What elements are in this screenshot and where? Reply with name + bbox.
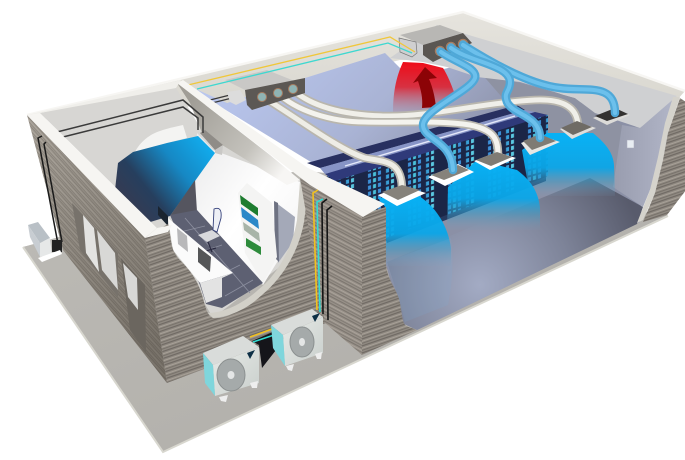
office back wall [40, 88, 302, 318]
striped right wall end [643, 98, 685, 222]
office air conditioner [200, 130, 223, 155]
partition cap [177, 80, 385, 217]
office desk [168, 218, 233, 303]
windows [72, 203, 118, 297]
front wall with torn opening [145, 180, 326, 383]
outdoor condenser unit right [271, 309, 323, 371]
partition wall left face [300, 178, 362, 355]
terminal 3 [474, 152, 516, 170]
rear rim of building [27, 12, 685, 128]
wall caps [27, 80, 385, 238]
terminal 5 [560, 121, 596, 139]
terminal 6 [593, 108, 630, 125]
dark red return air arrow [413, 67, 437, 108]
office floor [170, 210, 263, 308]
left duct connector box [245, 78, 305, 110]
darker recess wall [480, 72, 622, 187]
server racks [307, 105, 548, 243]
rack base [386, 177, 546, 243]
rear pipes to left ceiling device [210, 95, 232, 103]
rack fronts [325, 115, 548, 242]
monitor rear [177, 228, 188, 252]
office dark cabinets and blue air cone [115, 136, 215, 223]
faint cone spill on floor [386, 238, 452, 322]
monitor front [198, 247, 211, 272]
partition wall inner face [177, 83, 300, 185]
cone 3 [522, 133, 615, 196]
ceiling terminals [378, 108, 630, 206]
cream ducts [263, 90, 578, 190]
blue duct to second terminal [423, 52, 475, 170]
cone 2 [447, 160, 540, 230]
red warm air fan [393, 62, 454, 112]
floor of main room [387, 178, 643, 330]
outdoor condenser unit left [203, 336, 259, 402]
left wall [27, 115, 167, 383]
connecting pipes between outdoor units [250, 329, 274, 342]
blue duct to fourth terminal [451, 48, 540, 138]
partition wall front face [362, 207, 417, 355]
office rear pipes [57, 100, 203, 137]
terminal 2 [428, 164, 474, 186]
duct to second terminal [278, 93, 498, 155]
left ceiling device [227, 90, 246, 105]
terminal 4 [521, 134, 560, 155]
office chair [198, 208, 221, 252]
shadow between outdoor units [252, 331, 276, 368]
terminal 1 [378, 185, 426, 206]
right duct connector box [400, 25, 472, 62]
ceiling soffit [390, 25, 677, 128]
wall mounted black pipes [38, 136, 62, 244]
torn edge of office opening [208, 182, 309, 318]
cold air cones [378, 133, 615, 322]
refrigerant pipes along rear rim [188, 37, 415, 89]
ceiling device near right box [399, 38, 417, 57]
torn edge of right wall [637, 97, 680, 223]
door [121, 258, 146, 352]
office torn ceiling swirl [135, 125, 187, 152]
cone 1 [378, 194, 451, 266]
blue ducts [423, 45, 615, 170]
office right wall [195, 133, 300, 285]
wall socket [627, 140, 634, 148]
rack tops [307, 105, 548, 181]
right side wall [480, 72, 675, 207]
left wall cap [27, 113, 157, 238]
ground slab [23, 170, 668, 452]
office dark corner below cone [170, 180, 197, 216]
blue duct to sixth terminal [463, 45, 615, 113]
main room back wall [180, 53, 645, 330]
small outdoor unit [28, 222, 62, 262]
office shelf unit [238, 183, 277, 283]
lit wall [613, 97, 675, 207]
office window [274, 201, 295, 263]
left duct connector box top [225, 70, 297, 90]
front wall cap [145, 225, 172, 238]
duct to third terminal [293, 90, 578, 127]
duct to first terminal [263, 97, 402, 190]
rear rim of office [27, 80, 181, 115]
office dark screen [158, 206, 168, 226]
wall service pipes [313, 190, 332, 320]
